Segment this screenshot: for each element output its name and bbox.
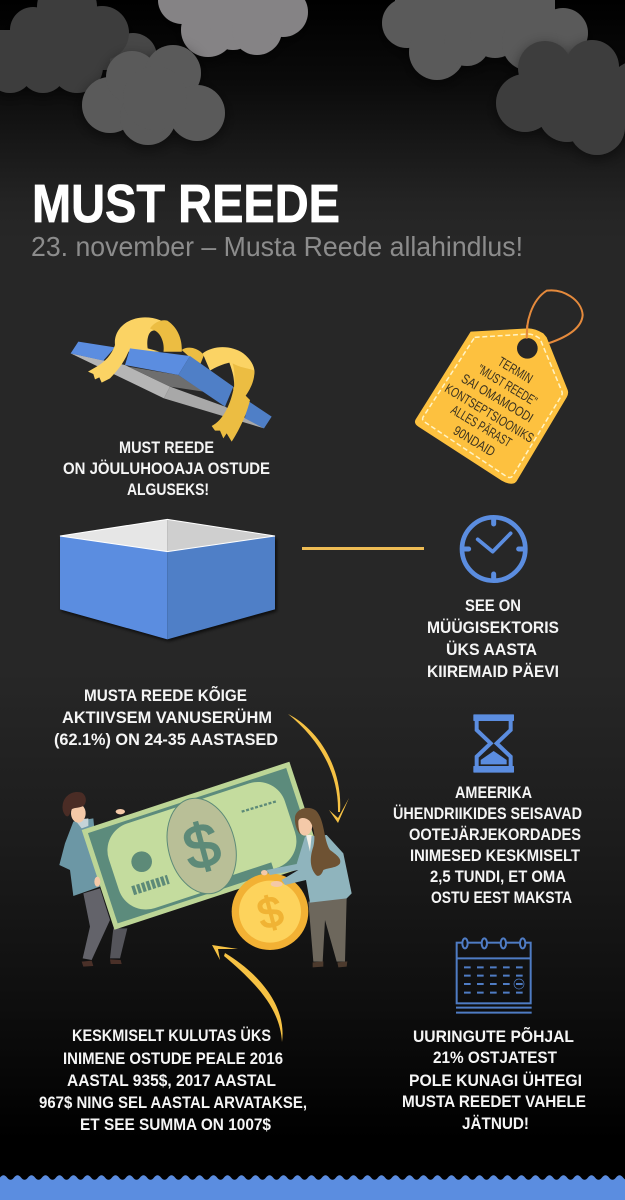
icon: price tag [415, 290, 583, 484]
arrow: to coin [212, 945, 283, 1042]
text: spending: INIMENE OSTUDE PEALE 2016 [63, 1050, 283, 1068]
text: spending: AASTAL 935$, 2017 AASTAL [67, 1072, 276, 1090]
cloud: top centre light [158, 0, 308, 57]
arrow: to woman [288, 714, 349, 823]
woman [261, 808, 352, 967]
text: busiest days: MÜÜGISEKTORIS [427, 618, 559, 637]
man [59, 792, 127, 967]
text: queues in the USA: OSTU EEST MAKSTA [431, 889, 572, 907]
icon: gift lid with ribbon [71, 317, 272, 442]
text: busiest days: KIIREMAID PÄEVI [427, 663, 559, 681]
connector line [302, 547, 424, 550]
text: survey: POLE KUNAGI ÜHTEGI [409, 1071, 582, 1090]
icon: hourglass [473, 714, 514, 773]
text: age group: AKTIIVSEM VANUSERÜHM [62, 708, 272, 727]
text: busiest days: ÜKS AASTA [446, 640, 537, 659]
bottom wave [0, 1172, 625, 1200]
text: spending: ET SEE SUMMA ON 1007$ [80, 1116, 271, 1134]
icon: calendar [456, 938, 532, 1013]
coin [232, 873, 308, 950]
banknote [82, 762, 322, 930]
text: age group [54, 685, 278, 749]
text: tag label: "MUST REEDE" [475, 361, 540, 409]
text: queues in the USA: OOTEJÄRJEKORDADES [409, 826, 581, 844]
text: christmas season [63, 439, 270, 499]
text: age group: MUSTA REEDE KÕIGE [84, 685, 247, 705]
cloud: top right back [382, 0, 588, 80]
cloud: left front [82, 45, 225, 145]
text: survey: JÄTNUD! [462, 1115, 529, 1133]
text: age group: (62.1%) ON 24-35 AASTASED [54, 731, 278, 749]
text: queues in the USA: AMEERIKA [455, 784, 532, 802]
text: tag label: SAI OMAMOODI [459, 371, 536, 425]
text: queues in the USA [393, 784, 582, 907]
cloud: right front [496, 40, 625, 155]
text: christmas season: MUST REEDE [119, 439, 214, 457]
text: tag label: KONTSEPTSIOONIKS [442, 381, 536, 446]
text: tag label [442, 354, 540, 460]
text: tag label: ALLES PÄRAST [448, 402, 514, 450]
text: spending [39, 1026, 307, 1134]
icon: clock [462, 517, 525, 581]
text: busiest days: SEE ON [465, 597, 521, 615]
text: queues in the USA: 2,5 TUNDI, ET OMA [430, 868, 566, 886]
title: MUST REEDE [32, 174, 340, 234]
text: survey: UURINGUTE PÕHJAL [413, 1026, 574, 1046]
text: tag label: 90NDAID [451, 423, 498, 460]
text: christmas season: ALGUSEKS! [127, 481, 209, 499]
cloud: top left back [0, 0, 157, 93]
text: queues in the USA: INIMESED KESKMISELT [410, 847, 580, 865]
text: christmas season: ON JÖULUHOOAJA OSTUDE [63, 459, 270, 478]
text: survey [402, 1026, 586, 1133]
text: spending: 967$ NING SEL AASTAL ARVATAKSE, [39, 1094, 307, 1112]
text: queues in the USA: ÜHENDRIIKIDES SEISAVAD [393, 804, 582, 823]
illustration: people holding banknote and coin [59, 762, 352, 967]
text: spending: KESKMISELT KULUTAS ÜKS [72, 1026, 271, 1045]
text: tag label: TERMIN [495, 354, 535, 386]
icon: open blue box [60, 519, 275, 639]
coin: $ [253, 887, 288, 940]
text: survey: 21% OSTJATEST [433, 1049, 557, 1067]
banknote: $ [176, 809, 227, 885]
clouds [0, 0, 625, 155]
text: busiest days [427, 597, 559, 681]
subtitle: 23. november – Musta Reede allahindlus! [31, 231, 523, 262]
text: survey: MUSTA REEDET VAHELE [402, 1093, 586, 1111]
